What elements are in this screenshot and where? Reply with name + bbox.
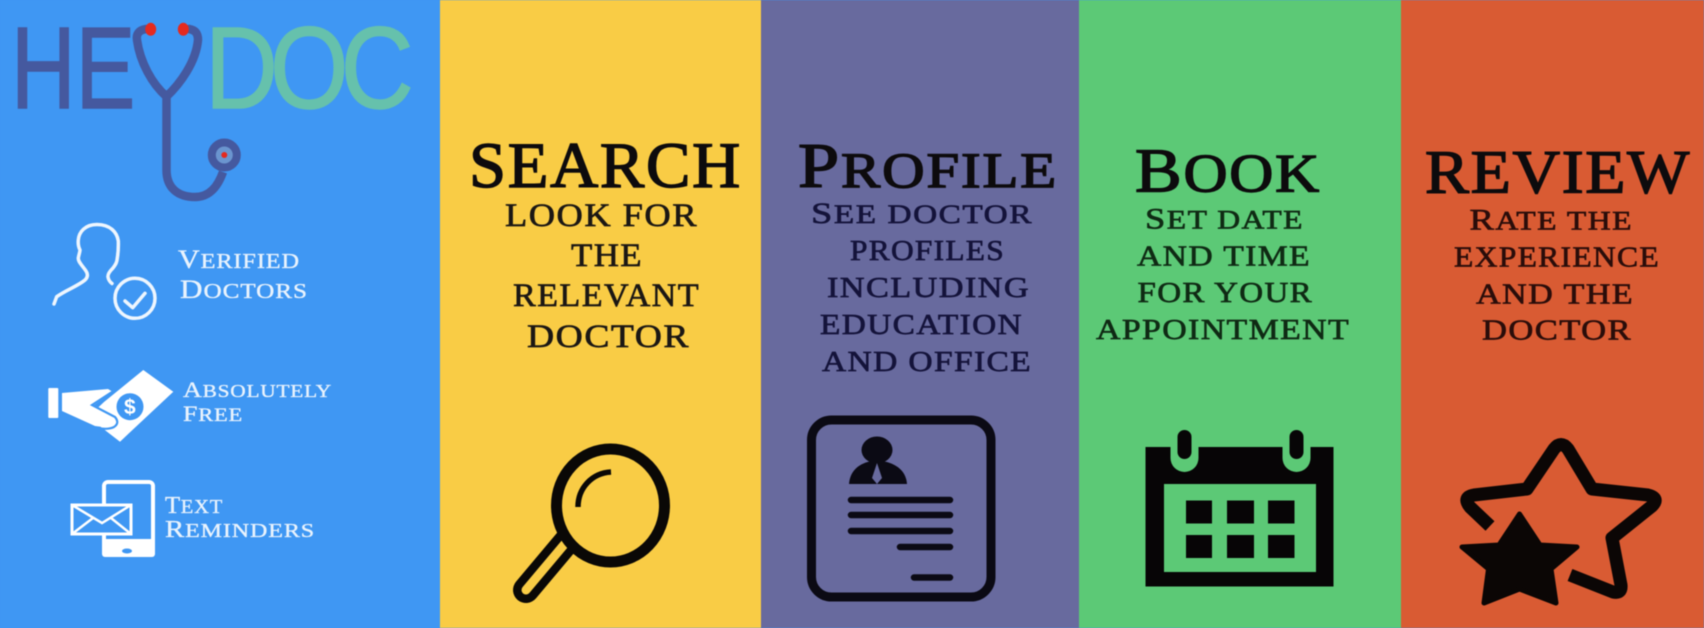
label: verified doctors: DOCTORS xyxy=(180,275,308,304)
panel: profile xyxy=(761,0,1079,628)
description: review: DOCTOR xyxy=(1482,314,1632,346)
label: absolutely free: FREE xyxy=(183,401,243,426)
panel: book xyxy=(1079,0,1401,628)
logo: HEY DOC with stethoscope: DOC xyxy=(205,5,410,134)
description: book: SET DATE xyxy=(1145,202,1304,236)
heading: review: REVIEW xyxy=(1425,140,1691,206)
description: profile: SEE DOCTOR xyxy=(811,197,1033,230)
logo: HEY DOC with stethoscope: HEY xyxy=(11,3,195,133)
icon: phone with envelope xyxy=(72,482,155,557)
icon: stars xyxy=(1462,444,1655,603)
description: profile: PROFILES xyxy=(850,236,1005,267)
description: profile xyxy=(811,197,1033,378)
description: book: FOR YOUR xyxy=(1138,277,1313,309)
description: profile: AND OFFICE xyxy=(822,347,1032,378)
icon: hand with money: $ xyxy=(124,396,136,419)
description: search: THE xyxy=(571,238,643,274)
heading: book: BOOK xyxy=(1135,138,1321,206)
heading: search: SEARCH xyxy=(469,130,742,202)
description: review: RATE THE xyxy=(1470,204,1633,236)
description: profile: INCLUDING xyxy=(827,273,1030,304)
description: book: APPOINTMENT xyxy=(1096,314,1350,346)
icon: magnifying glass xyxy=(526,449,664,590)
panel: search xyxy=(440,0,761,628)
label: text reminders: TEXT xyxy=(165,493,223,519)
label: verified doctors xyxy=(178,245,308,304)
description: review: AND THE xyxy=(1476,278,1634,310)
label: absolutely free xyxy=(183,377,332,426)
icon: profile document xyxy=(812,420,991,597)
panel: brand xyxy=(0,0,440,628)
description: review: EXPERIENCE xyxy=(1454,242,1660,274)
logo: HEY DOC with stethoscope xyxy=(11,3,410,197)
description: search: LOOK FOR xyxy=(505,198,698,234)
panel: review xyxy=(1401,0,1704,628)
label: text reminders xyxy=(165,493,315,543)
description: book xyxy=(1096,202,1350,346)
description: review xyxy=(1454,204,1660,346)
heading: profile: PROFILE xyxy=(798,131,1058,201)
description: search: RELEVANT xyxy=(513,278,700,314)
description: profile: EDUCATION xyxy=(820,310,1023,341)
label: absolutely free: ABSOLUTELY xyxy=(183,377,332,402)
label: text reminders: REMINDERS xyxy=(165,517,315,543)
label: verified doctors: VERIFIED xyxy=(178,245,300,274)
icon: calendar xyxy=(1146,437,1334,586)
icon: verified person xyxy=(54,224,155,318)
description: search: DOCTOR xyxy=(527,319,690,355)
description: book: AND TIME xyxy=(1137,240,1311,272)
icon: hand with money xyxy=(48,370,173,442)
description: search xyxy=(505,198,700,355)
